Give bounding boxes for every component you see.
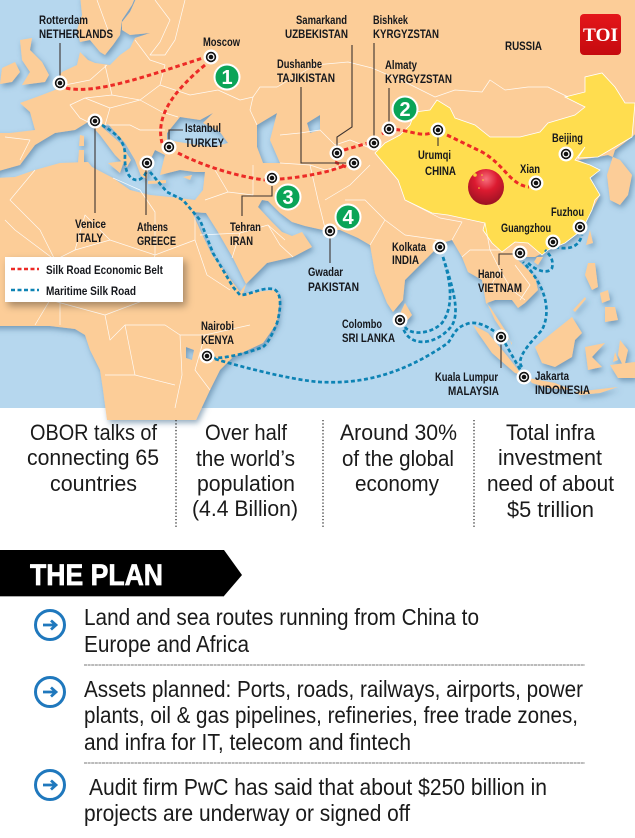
city: Xian: Xian <box>520 162 540 176</box>
city: Fuzhou <box>551 205 588 234</box>
city: Almaty: Almaty <box>385 58 417 72</box>
stat: global economy: of the global <box>342 446 454 471</box>
stat: 65 countries: OBOR talks of <box>30 420 158 445</box>
country borders <box>5 0 568 408</box>
city: Dushanbe <box>277 57 362 170</box>
badge 4 <box>336 204 360 230</box>
city: Almaty <box>382 58 452 136</box>
stat: 65 countries <box>27 420 159 496</box>
bullet 3: audit <box>36 770 547 826</box>
city: Athens <box>137 156 176 248</box>
bullet 2: assets: and infra for IT, telecom and fintech <box>84 729 411 755</box>
label: Russia: RUSSIA <box>505 39 542 53</box>
city: Moscow: Moscow <box>203 35 241 49</box>
China <box>375 73 635 255</box>
logo: TOI: TOI <box>583 25 618 46</box>
legend: Silk Road Economic Belt <box>46 263 163 277</box>
city: Bishkek: KYRGYZSTAN <box>373 27 439 41</box>
city: Dushanbe: TAJIKISTAN <box>277 71 335 85</box>
badge 3 <box>276 184 300 210</box>
city: Hanoi <box>478 246 528 295</box>
badge 4: 4 <box>342 207 354 229</box>
stat: global economy <box>340 420 457 496</box>
stat: population <box>192 420 298 521</box>
city: Urumqi <box>418 122 456 178</box>
icon: China flag ball <box>468 169 504 205</box>
city: Samarkand <box>285 13 352 160</box>
city: Nairobi: Nairobi <box>201 319 234 333</box>
city: Athens: Athens <box>137 220 168 234</box>
city: Rotterdam: NETHERLANDS <box>39 27 113 41</box>
route: silk road economic belt <box>66 58 529 187</box>
heading: the plan <box>0 550 242 596</box>
Borneo <box>535 317 582 367</box>
city: Colombo <box>342 312 408 345</box>
logo: TOI <box>580 14 621 55</box>
city: Gwadar: Gwadar <box>308 265 343 279</box>
bullet 2: assets <box>36 676 583 755</box>
city: Rotterdam: Rotterdam <box>39 13 88 27</box>
stat: population: (4.4 Billion) <box>192 496 298 521</box>
Taiwan, Hainan <box>534 230 593 265</box>
city: Istanbul <box>162 121 224 154</box>
city: Kuala Lumpur: Kuala Lumpur <box>435 370 498 384</box>
stat: global economy: economy <box>355 471 439 496</box>
Ireland <box>0 62 20 84</box>
city: Almaty: KYRGYZSTAN <box>385 72 452 86</box>
Sumatra <box>473 325 522 375</box>
Philippines <box>573 263 618 322</box>
stat: population: the world’s <box>196 446 295 471</box>
bullet 1: routes: Land and sea routes running from China to <box>84 604 479 630</box>
city: Xian <box>520 162 544 190</box>
UK <box>20 38 49 85</box>
legend: Maritime Silk Road <box>46 284 136 298</box>
city: Dushanbe: Dushanbe <box>277 57 322 71</box>
stat: infra investment: need of about <box>487 471 614 496</box>
stat: 65 countries: connecting 65 <box>27 445 159 470</box>
city: Beijing <box>552 131 583 162</box>
legend <box>5 257 183 302</box>
bullet 3: audit: projects are underway or signed off <box>84 800 411 826</box>
city: Jakarta <box>516 369 590 397</box>
badge 2 <box>392 96 418 122</box>
city: Moscow <box>203 35 241 64</box>
city: Samarkand: Samarkand <box>296 13 347 27</box>
bullet 3: audit: Audit firm PwC has said that about $250 billion in <box>89 774 547 800</box>
city: Istanbul: TURKEY <box>185 136 224 150</box>
city: Guangzhou: Guangzhou <box>501 221 551 235</box>
stat: infra investment: $5 trillion <box>507 497 594 522</box>
city: Gwadar <box>308 224 359 294</box>
city: Istanbul: Istanbul <box>185 121 221 135</box>
city: Guangzhou <box>501 221 560 250</box>
city: Nairobi <box>200 319 234 364</box>
city: Hanoi: Hanoi <box>478 267 503 281</box>
city: Jakarta: Jakarta <box>535 369 569 383</box>
city: Kuala Lumpur <box>435 330 508 398</box>
bullet 2: assets: plants, oil & gas pipelines, refineries, free trade zones, <box>84 702 578 728</box>
city: Nairobi: KENYA <box>201 333 234 347</box>
stat: population: population <box>197 471 295 496</box>
Sulawesi <box>585 343 605 370</box>
city: Hanoi: VIETNAM <box>478 281 522 295</box>
city: Bishkek <box>366 13 439 150</box>
Corsica, Sardinia, Sicily, Crete, Cyprus <box>78 135 192 184</box>
bullet 2: assets: Assets planned: Ports, roads, railways, airports, power <box>84 676 583 702</box>
stat: infra investment: Total infra <box>506 420 596 445</box>
city: Bishkek: Bishkek <box>373 13 408 27</box>
stat: infra investment <box>487 420 614 522</box>
city: Venice: ITALY <box>76 231 103 245</box>
city: Colombo: Colombo <box>342 317 382 331</box>
bullet 1: routes <box>36 604 479 657</box>
stat: 65 countries: countries <box>50 471 137 496</box>
eastern islands <box>610 340 635 378</box>
Sri Lanka <box>398 303 412 323</box>
badge 1 <box>214 64 240 90</box>
city: Urumqi: CHINA <box>425 164 456 178</box>
city: Beijing: Beijing <box>552 131 583 145</box>
badge 2: 2 <box>399 99 411 121</box>
city: Kolkata: Kolkata <box>392 240 426 254</box>
route: maritime silk road <box>102 125 582 382</box>
city: Venice: Venice <box>75 217 106 231</box>
city: Tehran: IRAN <box>230 234 253 248</box>
city: Kuala Lumpur: MALAYSIA <box>448 384 499 398</box>
badge 3: 3 <box>282 187 294 209</box>
landmasses <box>0 0 635 420</box>
Java <box>528 378 618 395</box>
panel: map <box>0 0 635 420</box>
city: Venice <box>75 114 106 245</box>
city: Kolkata: INDIA <box>392 253 419 267</box>
city: Urumqi: Urumqi <box>418 148 451 162</box>
stat: global economy: Around 30% <box>340 420 457 445</box>
bullet 1: routes: Europe and Africa <box>84 631 249 657</box>
stat: infra investment: investment <box>498 445 602 470</box>
city: Rotterdam <box>39 13 113 90</box>
heading: the plan: THE PLAN <box>30 559 163 592</box>
city: Fuzhou: Fuzhou <box>551 205 584 219</box>
city: Jakarta: INDONESIA <box>535 383 590 397</box>
stat: population: Over half <box>205 420 288 445</box>
city: Gwadar: PAKISTAN <box>308 280 359 294</box>
city: Athens: GREECE <box>137 234 176 248</box>
Scandinavia <box>77 0 136 55</box>
city: Colombo: SRI LANKA <box>342 331 395 345</box>
city: Tehran <box>230 170 280 248</box>
badge 1: 1 <box>221 67 233 89</box>
city: Samarkand: UZBEKISTAN <box>285 27 348 41</box>
sea background <box>0 0 635 408</box>
city: Kolkata <box>392 240 448 267</box>
city: Tehran: Tehran <box>230 220 261 234</box>
